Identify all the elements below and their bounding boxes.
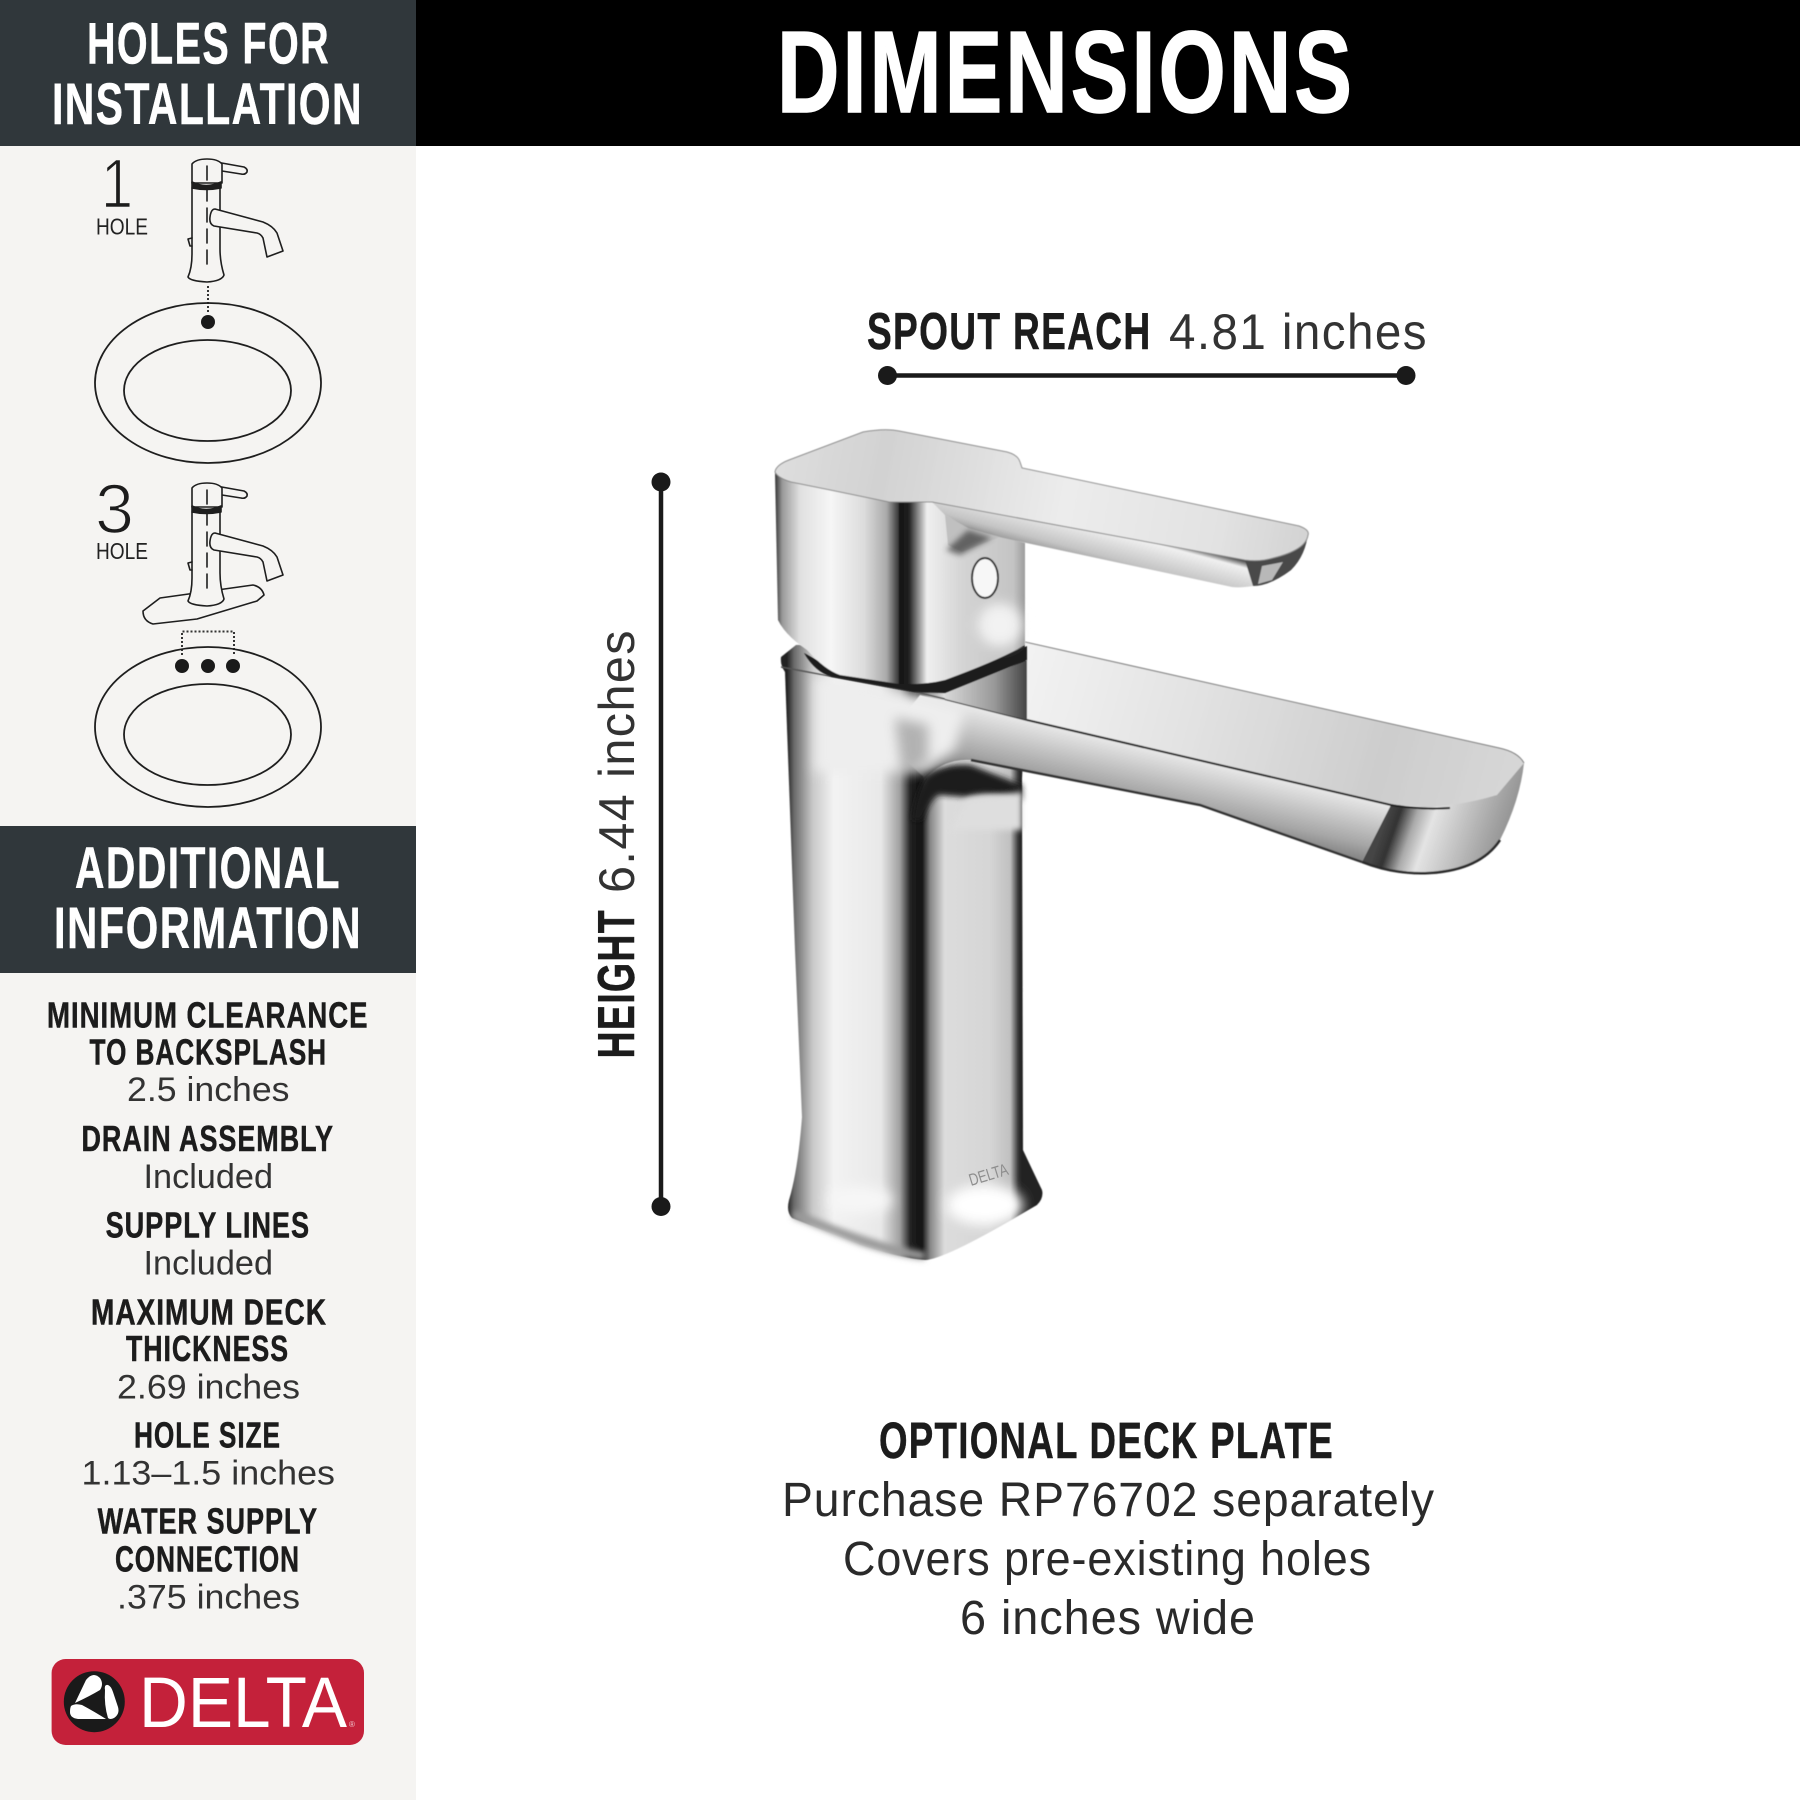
label: 1 hole: HOLE (96, 214, 148, 240)
label: 1 hole (96, 144, 148, 240)
spec: maximum deck thickness: MAXIMUM DECK (91, 1292, 327, 1332)
spec: hole size: 1.13–1.5 inches (82, 1454, 335, 1492)
text block: optional deck plate: Purchase RP76702 separately (782, 1474, 1435, 1527)
heading: holes for installation: HOLES FOR (87, 12, 330, 76)
spec: supply lines: SUPPLY LINES (106, 1204, 310, 1246)
spec: maximum deck thickness: 2.69 inches (117, 1368, 300, 1406)
spec: hole size (82, 1415, 335, 1492)
logo: delta: DELTA (139, 1664, 348, 1743)
label: 3 hole (95, 470, 148, 564)
spec: water supply connection (98, 1501, 318, 1616)
logo: delta (52, 1659, 364, 1745)
spec: maximum deck thickness: THICKNESS (126, 1328, 289, 1369)
spec: water supply connection: CONNECTION (115, 1539, 300, 1580)
icon: single hole faucet (188, 159, 283, 282)
spec: supply lines (106, 1204, 310, 1282)
faucet handle (775, 430, 1308, 693)
faucet body (781, 642, 1042, 1260)
spec: supply lines: Included (144, 1244, 273, 1282)
title bar: dimensions: DIMENSIONS (777, 7, 1355, 137)
spec: drain assembly: Included (144, 1158, 273, 1196)
spec: water supply connection: WATER SUPPLY (98, 1501, 318, 1542)
text block: optional deck plate: Covers pre-existing holes (843, 1533, 1372, 1586)
logo: delta: ® (349, 1720, 355, 1729)
icon: single hole basin (95, 286, 321, 463)
faucet spout (781, 642, 1524, 873)
heading: additional information: INFORMATION (54, 896, 362, 961)
spec: minimum clearance to backsplash: MINIMUM CLEARANCE (47, 994, 368, 1036)
heading: additional information (0, 826, 416, 973)
heading: holes for installation (0, 0, 416, 146)
spec: water supply connection: .375 inches (117, 1578, 300, 1616)
spec: maximum deck thickness (91, 1292, 327, 1406)
heading: holes for installation: INSTALLATION (52, 72, 363, 137)
spec: minimum clearance to backsplash: 2.5 inches (127, 1071, 290, 1109)
heading: additional information: ADDITIONAL (75, 836, 341, 901)
faucet brand mark: DELTA (967, 1160, 1011, 1190)
label: 3 hole: HOLE (96, 538, 148, 564)
label: 1 hole: 1 (101, 144, 133, 222)
title bar: dimensions (416, 0, 1800, 146)
dimension: spout reach: 4.81 inches (1169, 304, 1428, 360)
icon: three hole faucet with deck plate (143, 483, 283, 624)
dimension: spout reach: SPOUT REACH (867, 303, 1152, 361)
text block: optional deck plate: 6 inches wide (960, 1592, 1256, 1645)
spec: drain assembly (82, 1118, 334, 1196)
text block: optional deck plate (782, 1412, 1435, 1645)
panel: left sidebar (0, 0, 416, 1800)
dimension: spout reach (867, 303, 1428, 385)
label: 3 hole: 3 (95, 470, 134, 548)
dimension: height: 6.44 inches (589, 629, 645, 893)
spec: minimum clearance to backsplash: TO BACKSPLASH (90, 1032, 327, 1072)
dimension: height: HEIGHT (588, 909, 646, 1058)
dimension: height (588, 472, 670, 1216)
spec: drain assembly: DRAIN ASSEMBLY (82, 1118, 334, 1159)
spec: hole size: HOLE SIZE (134, 1415, 281, 1456)
illustration: chrome faucet (775, 430, 1524, 1260)
text block: optional deck plate: OPTIONAL DECK PLATE (879, 1412, 1334, 1469)
icon: three hole basin (95, 632, 321, 807)
spec: minimum clearance to backsplash (47, 994, 368, 1109)
